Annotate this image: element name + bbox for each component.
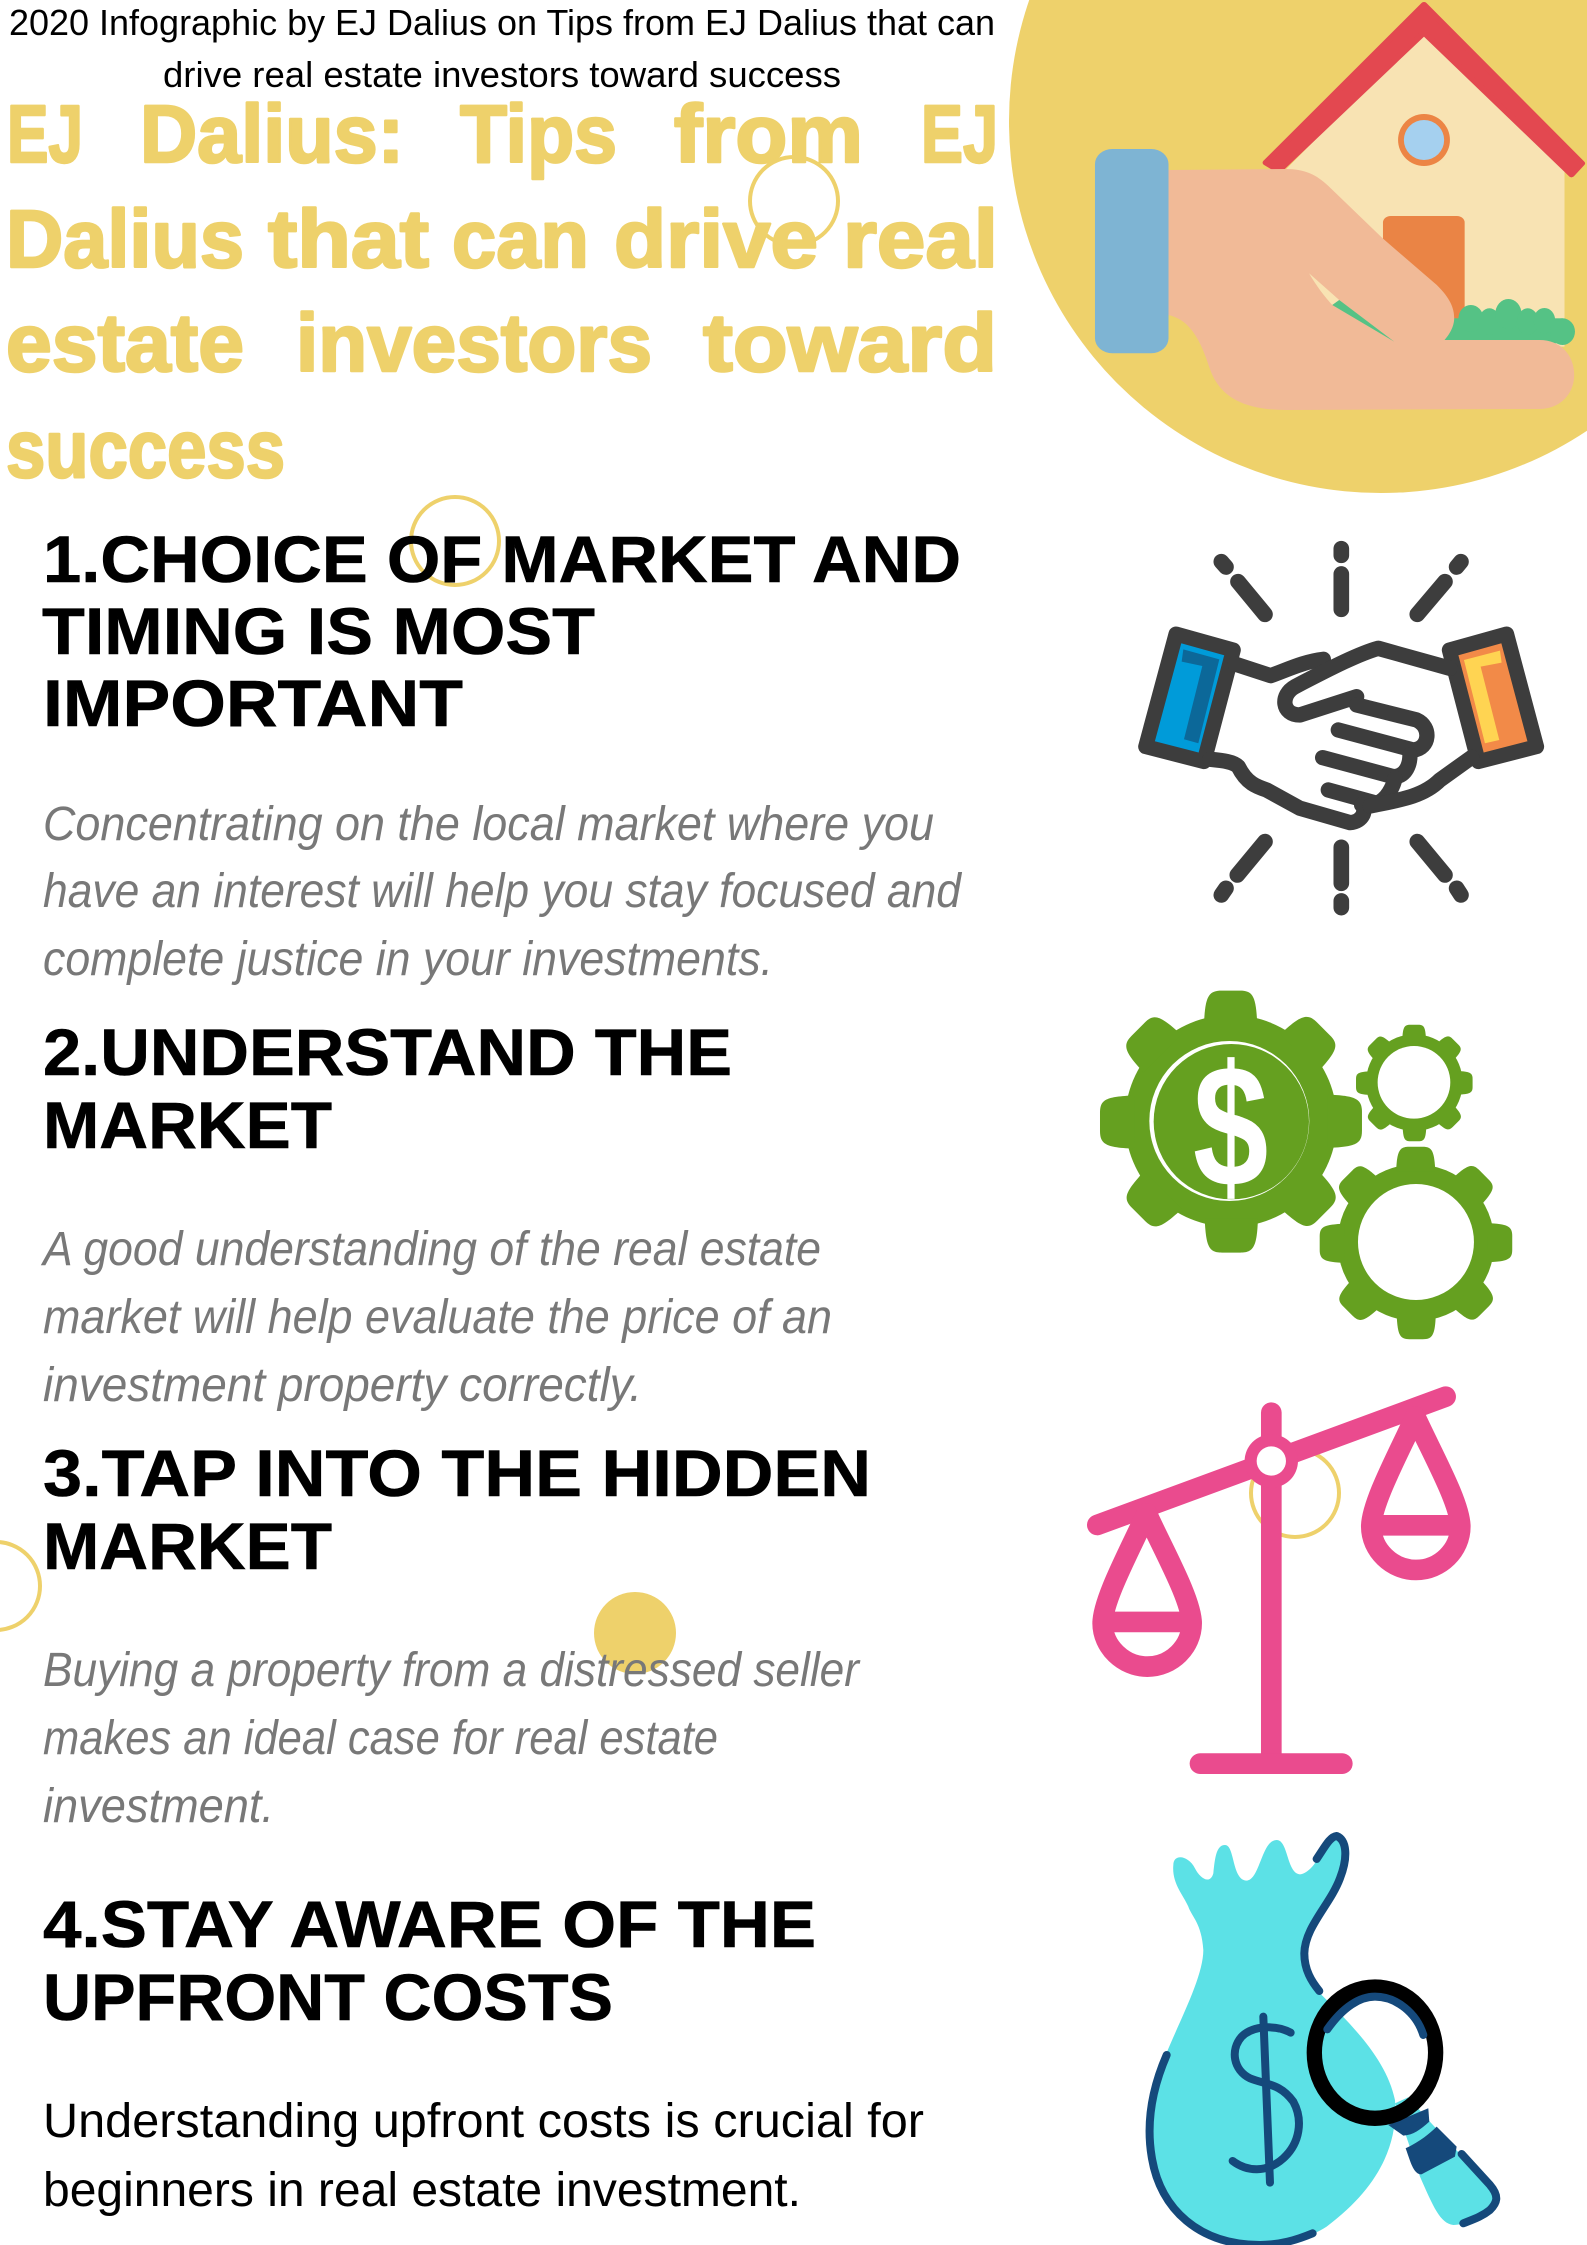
body text 1 bbox=[43, 798, 962, 986]
body text 3 bbox=[43, 1644, 861, 1833]
heading 3 bbox=[43, 1436, 871, 1583]
icon: gears with dollar bbox=[1100, 991, 1512, 1339]
heading 1 bbox=[42, 522, 961, 740]
icon: hand holding house bbox=[1095, 5, 1582, 410]
subtitle: drive real estate investors toward success bbox=[163, 54, 841, 95]
body text 4: beginners in real estate investment. bbox=[43, 2164, 801, 2217]
body text 4 bbox=[43, 2095, 924, 2217]
title: drive bbox=[614, 194, 818, 285]
yellow circle behind hero illustration bbox=[1009, 0, 1587, 493]
body text 1: complete justice in your investments. bbox=[43, 933, 773, 986]
title: from bbox=[674, 89, 863, 180]
title: estate bbox=[6, 298, 244, 389]
title: Tips bbox=[460, 89, 617, 180]
heading 4 bbox=[43, 1887, 816, 2034]
body text 2: investment property correctly. bbox=[43, 1359, 642, 1412]
heading 2: 2.UNDERSTAND THE bbox=[43, 1015, 732, 1089]
body text 2: market will help evaluate the price of an bbox=[43, 1291, 832, 1344]
body text 2 bbox=[40, 1223, 832, 1412]
icon: handshake bbox=[1146, 549, 1537, 908]
title: toward bbox=[703, 298, 997, 389]
decorative rings bbox=[0, 157, 1339, 1630]
body text 3: makes an ideal case for real estate bbox=[43, 1712, 718, 1765]
title: can bbox=[452, 194, 589, 285]
subtitle bbox=[9, 2, 995, 95]
body text 1: have an interest will help you stay focused and bbox=[43, 865, 962, 918]
title: success bbox=[6, 404, 285, 495]
body text 3: investment. bbox=[43, 1780, 274, 1833]
body text 1: Concentrating on the local market where you bbox=[43, 798, 934, 851]
title bbox=[6, 89, 998, 495]
decorative filled circle bbox=[594, 1592, 676, 1674]
title: real bbox=[843, 194, 998, 285]
title: Dalius bbox=[6, 194, 244, 285]
body text 3: Buying a property from a distressed seller bbox=[43, 1644, 861, 1697]
heading 3: MARKET bbox=[43, 1509, 332, 1583]
icon: gears with dollar: $ bbox=[1193, 1029, 1268, 1223]
title: Dalius: bbox=[140, 89, 404, 180]
heading 4: UPFRONT COSTS bbox=[43, 1960, 613, 2034]
title: EJ bbox=[921, 89, 998, 180]
heading 2: MARKET bbox=[43, 1088, 332, 1162]
heading 1: 1.CHOICE OF MARKET AND bbox=[43, 522, 961, 596]
body text 2: A good understanding of the real estate bbox=[40, 1223, 821, 1276]
heading 4: 4.STAY AWARE OF THE bbox=[43, 1887, 816, 1961]
heading 2 bbox=[43, 1015, 732, 1162]
heading 3: 3.TAP INTO THE HIDDEN bbox=[43, 1436, 871, 1510]
subtitle: 2020 Infographic by EJ Dalius on Tips from EJ Dalius that can bbox=[9, 2, 995, 43]
heading 1: TIMING IS MOST bbox=[42, 594, 595, 668]
title: EJ bbox=[7, 89, 83, 180]
title: investors bbox=[296, 298, 652, 389]
body text 4: Understanding upfront costs is crucial for bbox=[43, 2095, 924, 2148]
heading 1: IMPORTANT bbox=[43, 666, 463, 740]
icon: balance scale bbox=[1097, 1397, 1460, 1764]
title: that bbox=[268, 194, 429, 285]
icon: money bag with magnifier bbox=[1149, 1836, 1498, 2245]
